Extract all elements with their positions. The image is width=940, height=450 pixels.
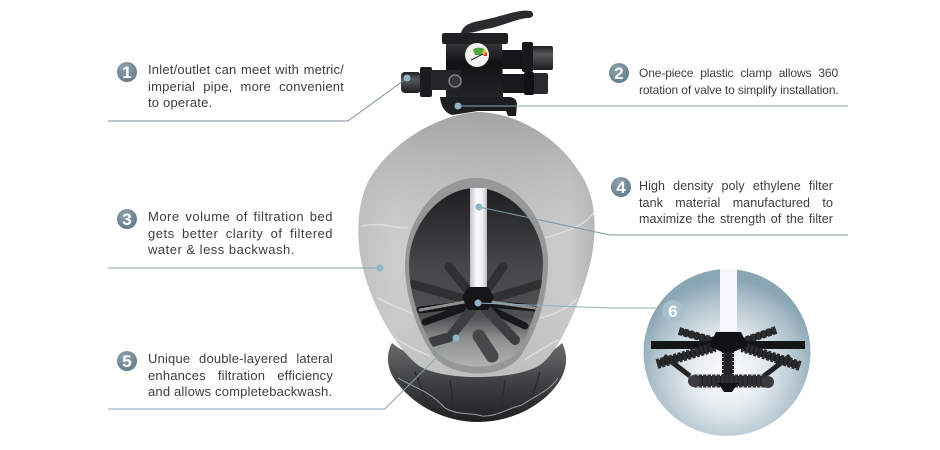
leader line 4 xyxy=(476,204,848,235)
detail sphere: double-layered lateral xyxy=(644,269,810,436)
text block 5 xyxy=(148,351,333,399)
badge 3 xyxy=(117,209,137,229)
text block 5: and allows completebackwash. xyxy=(148,384,332,399)
leader line 2 xyxy=(454,102,848,110)
text block 1: to operate. xyxy=(148,95,212,110)
text block 1 xyxy=(148,62,344,110)
text block 2: rotation of valve to simplify installation. xyxy=(639,82,839,96)
text block 3: water & less backwash. xyxy=(148,242,295,257)
badge 5: 5 xyxy=(122,352,132,371)
leader line 1 xyxy=(108,74,410,121)
tank body xyxy=(358,112,595,377)
leader line 5 xyxy=(108,334,460,409)
badge 1: 1 xyxy=(122,63,132,82)
text block 5: enhances filtration efficiency xyxy=(148,368,333,382)
text block 1: imperial pipe, more convenient xyxy=(148,78,344,94)
text block 5: Unique double-layered lateral xyxy=(148,351,333,366)
badge 1 xyxy=(117,62,137,82)
badge 2 xyxy=(609,63,629,83)
badge 4 xyxy=(611,177,631,197)
text block 3 xyxy=(148,209,333,257)
clamp xyxy=(440,97,517,116)
laterals xyxy=(412,267,540,356)
text block 4 xyxy=(639,179,833,226)
gauge xyxy=(465,43,489,67)
badge 2: 2 xyxy=(614,64,624,83)
base skirt xyxy=(388,343,566,422)
multiport valve xyxy=(401,11,553,116)
text block 4: High density poly ethylene filter xyxy=(639,179,833,193)
text block 2: One-piece plastic clamp allows 360 xyxy=(639,66,838,80)
number 6: 6 xyxy=(668,302,678,321)
badge 4: 4 xyxy=(616,178,626,197)
tank cutaway xyxy=(405,178,548,374)
number 6 xyxy=(662,300,684,322)
filter tank illustration xyxy=(358,11,595,422)
leader line 6 xyxy=(474,300,656,308)
text block 3: gets better clarity of filtered xyxy=(148,226,333,240)
leader line 3 xyxy=(108,264,384,272)
text block 2 xyxy=(639,66,839,96)
text block 1: Inlet/outlet can meet with metric/ xyxy=(148,62,344,77)
text block 4: maximize the strength of the filter xyxy=(639,212,833,226)
lateral assembly xyxy=(651,330,805,392)
text block 3: More volume of filtration bed xyxy=(148,209,333,224)
badge 3: 3 xyxy=(122,210,132,229)
badge 5 xyxy=(117,351,137,371)
text block 4: tank material manufactured to xyxy=(639,196,833,210)
